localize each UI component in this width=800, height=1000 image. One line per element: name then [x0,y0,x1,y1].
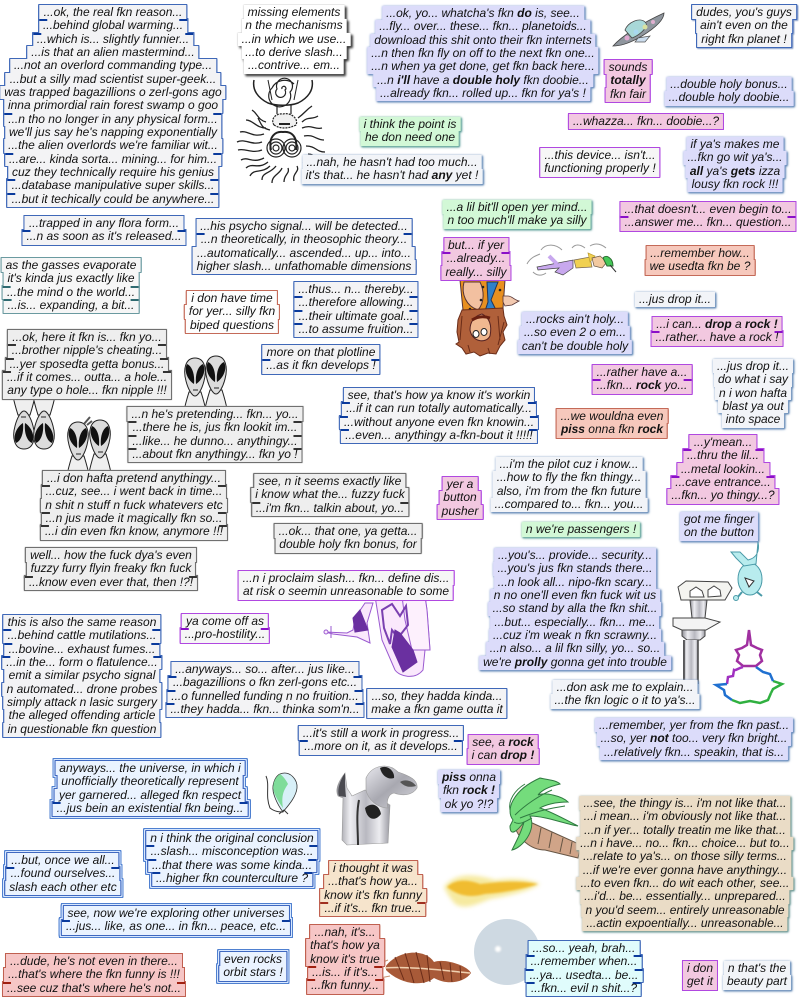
speech: whatcha's fkn do: ...fly... over... these... fkn... planetoids... [379,19,587,33]
speech: thus thereby: ...to assume fruition... [299,322,413,336]
speech: existential fkn being [53,761,247,816]
speech: cattle mutilations: ...behind cattle mutilations... [8,628,156,642]
speech: provide security: n no one'll even fkn fuck wit us [494,588,656,602]
icon: blue hanging creature [731,542,762,600]
speech: not like that: ...if we're ever gonna have anythingy... [583,863,787,877]
speech: found ourselves: ...but, once we all... [11,853,115,867]
speech: blast ya into space: do what i say [718,372,788,386]
speech: blast ya into space: blast ya out [722,399,784,413]
speech: cave entrance: ...thru the lil... [687,448,759,462]
speech: i thought it was: ...that's how ya... [328,874,418,888]
speech: dude he's not in there: ...that's where the fkn funny is !!! [8,967,180,981]
icon: fractal outline [716,630,782,703]
speech: provide security: ...so stand by alla the fkn shit... [493,601,657,615]
speech: found ourselves [5,853,121,895]
speech: dude he's not in there: ...see cuz that's where he's not... [7,981,181,995]
speech: drop a rock [650,316,784,347]
speech: fkn evil n shit: ...fkn... evil n shit...? [531,981,637,995]
speech: found ourselves: slash each other etc [9,880,117,894]
speech: blast ya into space: n i won hafta [719,386,787,400]
speech: sounds totally fkn fair: totally [610,73,646,87]
speech: cave entrance: ...y'mean... [694,435,752,449]
speech: make a fkn game: ...so, they hadda kinda... [372,689,502,703]
speech: existential fkn being: unofficially theoretically represent [61,774,239,788]
speech: know it's true [306,925,384,994]
speech: thus thereby: ...thus... n... thereby... [298,282,414,296]
speech: whatcha's fkn do: ...n then fkn fly on off to the next fkn one... [371,46,595,60]
speech: whazza doobie: ...whazza... fkn... doobie...? [573,114,719,128]
icon: palm tree [510,778,581,858]
speech: flora form: ...trapped in any flora form... [29,216,179,230]
speech: psycho signal: higher slash... unfathomable dimensions [197,259,411,273]
icon: alien second standing [203,356,229,430]
speech: he's pretending: ...n he's pretending... fkn... yo... [131,407,299,421]
speech: blast ya into space [712,358,796,431]
speech: yer from the past: ...relatively fkn... speakin, that is... [604,745,784,759]
icon: flying pilot [527,244,616,275]
speech: bagazillions funding: ...anyways... so... after... jus like... [175,662,355,676]
speech: double holy bonus for: double holy fkn bonus, for [279,537,417,551]
speech: bagazillions funding: ...they hadda... fkn... thinka som'n... [170,702,360,716]
speech: finger on button: on the button [684,525,754,539]
speech: original conclusion: n i think the original conclusion [150,831,314,845]
speech: provide security: ...you's... provide... security... [498,548,652,562]
icon: crystal sphere [474,919,540,985]
speech: sounds totally fkn fair [604,59,653,103]
speech: rather have a rock [592,364,693,395]
speech: not like that: ...to even fkn... do wit each other, see... [581,876,789,890]
speech: provide security: ...you's jus fkn stands there... [497,561,653,575]
speech: device not functioning: functioning properly ! [544,161,656,175]
speech: cattle mutilations: the alleged offending article [9,708,155,722]
speech: exactly like i know: i know what the... fuzzy fuck [255,487,405,501]
speech: know it's true: ...nah, it's... [315,925,375,939]
speech: he's pretending: ...about fkn anythingy... fkn yo ! [132,447,298,461]
speech: a rock i can drop: see, a rock [472,735,534,749]
speech: button pusher: yer a [447,477,473,491]
speech: piss onna fkn rock ok yo: fkn rock ! [443,783,495,797]
speech: bagazillions funding: ...o funnelled funding n no fruition... [171,689,359,703]
speech: global warming reason: ...but it techically could be anywhere... [12,192,214,206]
speech: more on plotline: more on that plotline [267,345,375,359]
speech: whatcha's fkn do: ...ok, yo... whatcha's fkn do is, see... [386,6,580,20]
speech: brother nipple: ...brother nipple's cheating... [12,343,162,357]
speech: button pusher [436,476,484,520]
speech: more on plotline: ...as it fkn develops ! [266,358,376,372]
speech: how ya know it's workin: ...without anyone even fkn knowin... [344,415,534,429]
icon: feather [378,952,471,983]
speech: provide security [478,546,674,673]
speech: doesn't begin to answer: ...that doesn't... even begin to... [624,202,792,216]
speech: make a fkn game: make a fkn game outta it [371,702,503,716]
speech: a lil bit: ...a lil bit'll open yer mind... [446,200,588,214]
speech: bagazillions funding: ...bagazillions o fkn zerl-gons etc... [173,675,357,689]
speech: global warming reason: ...are... kinda sorta... mining... for him... [9,152,217,166]
speech: i proclaim: ...n i proclaim slash... fkn... define dis... [243,571,449,585]
speech: not like that: n you'd seem... entirely unreasonable [585,903,785,917]
speech: pro-hostility: ya come off as [186,614,264,628]
speech: piss onna rock: ...we wouldna even [561,409,663,423]
speech: brother nipple: ...yer sposedta getta bonus... [10,357,164,371]
speech: don ask me to explain: ...don ask me to explain... [557,680,693,694]
speech: he don need one [358,116,464,149]
speech: pilot from future: ...how to fly the fkn thingy... [497,470,641,484]
icon: flying saucer [613,13,664,46]
speech: but if yer already silly: but... if yer [448,238,504,252]
speech: cave entrance: ...fkn... yo thingy...? [671,488,775,502]
speech: how ya know it's workin [338,387,539,444]
speech: psycho signal [192,218,417,275]
speech: global warming reason: ...but a silly mad scientist super-geek... [10,72,216,86]
speech: fuzzy furry flyin: ...know even ever that, then !?! [29,575,193,589]
speech: but if yer already silly [440,237,512,281]
speech: brother nipple: ...if it comes... outta... a hole... [7,370,167,384]
speech: the beauty part: n that's the [728,961,786,975]
speech: exploring other universes: ...jus... like, as one... in fkn... peace, etc... [66,919,286,933]
speech: fuzzy furry flyin: fuzzy furry flyin freaky fkn fuck [31,561,191,575]
speech: not like that: ...i mean... i'm obviously not like that... [584,809,786,823]
speech: even rocks orbit stars [219,952,287,981]
speech: doesn't begin to answer: ...answer me... fkn... question... [625,215,791,229]
speech: a lil bit [441,198,594,232]
speech: existential fkn being: yer garnered... alleged fkn respect [59,788,241,802]
speech: cave entrance: ...metal lookin... [681,462,765,476]
speech: i thought it was: know it's fkn funny [324,888,422,902]
speech: not like that: ...actin expoentially... unreasonable... [586,916,784,930]
speech: not like that: ...i'd... be... essentially... unprepared... [584,889,786,903]
speech: dudes wrong planet: right fkn planet ! [701,32,787,46]
speech: psycho signal: ...n theoretically, in theosophic theory... [201,232,407,246]
speech: global warming reason: ...not an overlord commanding type... [14,58,212,72]
speech: biped questions [184,290,280,334]
speech: pro-hostility [181,614,269,643]
speech: i don get it [683,961,717,990]
speech: but if yer already silly: really... silly [445,265,507,279]
speech: original conclusion: ...that there was some kinda... [152,858,312,872]
speech: psycho signal: ...his psycho signal... will be detected... [200,219,408,233]
speech: went back in time: ...i don hafta pretend anythingy... [47,471,221,485]
speech: make a fkn game [367,689,507,718]
speech: global warming reason: ...is that an alien mastermind... [31,45,195,59]
speech: the beauty part [723,961,791,990]
speech: double holy bonus for [273,522,424,554]
speech: whatcha's fkn do: ...n i'll have a double holy fkn doobie... [377,73,589,87]
speech: provide security: ...cuz i'm weak n fkn scrawny... [493,628,657,642]
speech: rocks ain't holy: can't be double holy [522,339,628,353]
speech: a rock i can drop: i can drop ! [472,748,534,762]
speech: remember how: we usedta fkn be ? [650,259,750,273]
speech: i proclaim: at risk o seemin unreasonable to some [243,584,449,598]
speech: global warming reason: ...database manipulative super skills... [12,178,214,192]
speech: biped questions: for yer... silly fkn [189,304,275,318]
speech: rocks ain't holy: ...rocks ain't holy... [526,312,624,326]
speech: psycho signal: ...automatically... ascended... up... into... [197,246,411,260]
speech: thus thereby: ...therefore allowing... [299,295,413,309]
speech: hasn't had any: it's that... he hasn't had any yet ! [306,168,478,182]
speech: rather have a rock: ...fkn... rock yo... [597,378,687,392]
speech: work in progress: ...more on it, as it develops... [304,739,458,753]
speech: double holy bonus: ...double holy bonus... [670,77,788,91]
speech: dudes wrong planet: ain't even on the [700,18,788,32]
speech: original conclusion: ...slash... misconception was... [151,844,313,858]
speech: rather have a rock: ...rather have a... [597,365,687,379]
speech: i don get it: i don [687,961,713,975]
speech: thus thereby: ...their ultimate goal... [299,309,413,323]
speech: he don need one: he don need one [365,130,455,144]
speech: cave entrance: ...cave entrance... [675,475,771,489]
speech: went back in time: ...n jus made it magically fkn so... [46,511,222,525]
speech: pilot from future: ...i'm the pilot cuz i know... [499,457,639,471]
speech: finger on button: got me finger [684,512,754,526]
speech: button pusher: pusher [442,504,478,518]
speech: exactly like i know [250,472,410,518]
speech: gasses evaporate [0,257,142,314]
speech: not like that: ...n if yer... totally treatin me like that... [584,823,786,837]
icon: stone hammer tower [673,581,732,684]
speech: double holy bonus: ...double holy doobie... [669,90,789,104]
speech: dudes wrong planet: dudes, you's guys [696,5,792,19]
icon: upside-down caveman [456,280,519,356]
speech: gasses evaporate: it's kinda jus exactly like [7,271,135,285]
speech: work in progress: ...it's still a work in progress... [303,726,459,740]
speech: drop a rock: ...i can... drop a rock ! [656,317,778,331]
speech: dude he's not in there: ...dude, he's not even in there... [10,954,178,968]
speech: more on plotline [261,344,380,375]
speech: n we're passengers: n we're passengers ! [526,522,636,536]
speech: the beauty part: beauty part [727,974,787,988]
speech: existential fkn being: anyways... the universe, in which i [59,761,241,775]
speech: how ya know it's workin: ...even... anythingy a-fkn-bout it !!!!! [345,428,533,442]
icon: balloon [266,773,297,814]
icon: chrome dog [337,766,417,845]
speech: lousy fkn rock [682,136,790,195]
speech: dudes wrong planet [691,4,799,50]
speech: lousy fkn rock: if ya's makes me [690,137,779,151]
speech: whatcha's fkn do [366,4,602,104]
speech: double holy bonus for: ...ok... that one, ya getta... [279,524,417,538]
speech: not like that: ...relate to ya's... on those silly terms... [583,849,787,863]
speech: global warming reason: cuz they technically require his genius [12,165,214,179]
speech: provide security: ...but... especially... fkn... me... [494,615,656,629]
speech: flora form: ...n as soon as it's released... [26,229,182,243]
speech: lousy fkn rock: lousy fkn rock !!! [692,177,778,191]
speech: global warming reason: ...ok, the real fkn reason... [44,5,182,19]
speech: missing elements: missing elements [248,5,340,19]
icon: aliens standing top [182,358,208,432]
speech: know it's true: that's how ya [310,938,380,952]
speech: gasses evaporate: as the gasses evaporate [6,258,136,272]
speech: he's pretending: ...like... he dunno... anythingy... [132,434,298,448]
speech: global warming reason: ...the alien overlords we're familiar wit... [8,138,218,152]
speech: even rocks orbit stars: orbit stars ! [223,965,283,979]
speech: how ya know it's workin: see, that's how ya know it's workin [348,388,530,402]
speech: biped questions: i don have time [191,291,273,305]
speech: he's pretending: ...there he is, jus fkn lookit im... [133,420,297,434]
speech: cattle mutilations: this is also the same reason [8,615,156,629]
speech: but if yer already silly: ...already... [447,251,505,265]
speech: device not functioning: ...this device... isn't... [544,148,656,162]
speech: blast ya into space: ...jus drop it... [717,359,789,373]
speech: jus drop it: ...jus drop it... [639,292,711,306]
speech: existential fkn being: ...jus bein an existential fkn being... [57,801,243,815]
speech: dude he's not in there [3,954,185,996]
speech: pilot from future: ...compared to... fkn... you... [495,497,643,511]
speech: missing elements: ...contrive... em... [248,58,340,72]
speech: remember how [644,245,756,276]
speech: not like that [576,796,794,931]
speech: know it's true: ...is... if it's... [312,965,378,979]
speech: rocks ain't holy [516,310,635,357]
speech: fkn evil n shit: ...remember when... [531,954,637,968]
speech: missing elements: ...to derive slash... [245,45,343,59]
icon: yellow flame [444,876,540,907]
speech: cattle mutilations: n automated... drone probes [7,682,157,696]
speech: original conclusion [146,831,318,886]
speech: i proclaim [239,571,453,600]
speech: i don get it: get it [687,974,713,988]
speech: even rocks orbit stars: even rocks [224,952,282,966]
speech: he don need one: i think the point is [364,117,456,131]
speech: global warming reason: we'll jus say he's napping exponentially [9,125,217,139]
speech: finger on button [678,510,761,544]
speech: global warming reason: ...n tho no longer in any physical form... [8,112,218,126]
speech: went back in time [39,469,228,542]
speech: went back in time: n shit n stuff n fuck whatevers etc [45,498,223,512]
speech: cattle mutilations: simply attack n lasic surgery [7,695,157,709]
speech: not like that: ...see, the thingy is... i'm not like that... [583,796,787,810]
speech: sounds totally fkn fair: fkn fair [610,87,646,101]
speech: whatcha's fkn do: ...n when ya get done, get fkn back here... [371,59,595,73]
speech: missing elements: ...in which we use... [242,32,346,46]
speech: how ya know it's workin: ...if it can run totally automatically... [346,401,532,415]
speech: don ask me to explain [550,680,700,709]
speech: went back in time: ...cuz, see... i went back in time... [46,484,222,498]
speech: don ask me to explain: ...the fkn logic o it to ya's... [554,693,696,707]
icon: upside-down aliens [11,375,57,449]
speech: a rock i can drop [468,735,538,764]
speech: yer from the past: ...so, yer not too... very fkn bright... [601,731,787,745]
speech: work in progress [299,726,463,755]
speech: pilot from future: also, i'm from the fkn future [497,484,641,498]
speech: hasn't had any [300,154,486,187]
speech: i thought it was: i thought it was [333,861,413,875]
speech: sounds totally fkn fair: sounds [609,60,647,74]
speech: i thought it was: ...if it's... fkn true... [325,901,421,915]
speech: provide security: ...n also... a lil fkn silly, yo... so... [490,641,660,655]
speech: lousy fkn rock: ...fkn go wit ya's... [688,150,782,164]
speech: global warming reason [0,4,226,208]
speech: brother nipple [1,328,172,401]
speech: cattle mutilations: in questionable fkn question [8,722,156,736]
speech: pilot from future [489,456,651,515]
speech: whatcha's fkn do: download this shit onto their fkn internets [374,33,592,47]
speech: original conclusion: ...higher fkn counterculture ? [156,871,308,885]
speech: whatcha's fkn do: ...already fkn... rolled up... fkn for ya's ! [380,86,586,100]
speech: brother nipple: any type o hole... fkn nipple !!! [7,383,167,397]
speech: missing elements: n the mechanisms [245,18,343,32]
speech: drop a rock: ...rather... have a rock ! [656,330,778,344]
speech: device not functioning [539,147,660,178]
speech: a lil bit: n too much'll make ya silly [447,213,586,227]
speech: not like that: ...n i have... no... fkn... choice... but to... [580,836,790,850]
icon: upside-down spiral figure [237,78,325,183]
speech: lousy fkn rock: all ya's gets izza [690,164,780,178]
speech: double holy bonus [663,76,797,109]
speech: piss onna fkn rock ok yo: ok yo ?!? [445,797,493,811]
speech: blast ya into space: into space [726,412,780,426]
speech: remember how: ...remember how... [650,246,750,260]
speech: button pusher: button [443,490,477,504]
speech: know it's true: ...fkn funny... [311,978,379,992]
speech: cave entrance [666,434,780,505]
speech: gasses evaporate: ...is... expanding, a bit... [8,298,134,312]
speech: doesn't begin to answer [619,201,796,232]
speech: global warming reason: ...which is... slightly funnier... [37,32,189,46]
speech: flora form [21,215,186,246]
speech: piss onna fkn rock ok yo [438,770,500,812]
speech: thus thereby [293,281,418,338]
speech: exactly like i know: see, n it seems exactly like [259,474,401,488]
speech: yer from the past [595,718,793,760]
speech: global warming reason: ...behind global warming... [43,18,183,32]
speech: know it's true: know it's true [310,952,380,966]
speech: rocks ain't holy: ...so even 2 o em... [524,325,626,339]
speech: fkn evil n shit: ...so... yeah, brah... [533,941,635,955]
speech: biped questions: biped questions [190,318,274,332]
speech: global warming reason: inna primordial rain forest swamp o goo [8,98,218,112]
speech: brother nipple: ...ok, here it fkn is... fkn yo... [12,330,162,344]
speech: piss onna rock [556,408,669,439]
speech: piss onna fkn rock ok yo: piss onna [442,770,496,784]
speech: provide security: ...n look all... nipo-fkn scary... [498,575,652,589]
speech: fkn evil n shit: ...ya... usedta... be... [530,968,638,982]
speech: fkn evil n shit [526,941,642,996]
icon: high-fiving aliens [65,417,113,496]
speech: cattle mutilations [2,615,162,737]
speech: went back in time: ...i din even fkn know, anymore !!! [45,524,223,538]
speech: exploring other universes: see, now we're exploring other universes [67,906,285,920]
speech: cattle mutilations: ...bovine... exhaust fumes... [9,642,155,656]
speech: i thought it was [320,861,426,916]
speech: cattle mutilations: ...in the... form o flatulence... [6,655,158,669]
speech: found ourselves: ...found ourselves... [11,866,115,880]
speech: piss onna rock: piss onna fkn rock [561,422,663,436]
speech: pro-hostility: ...pro-hostility... [185,627,265,641]
speech: exploring other universes [62,906,290,935]
speech: bagazillions funding [166,662,364,717]
speech: he's pretending [126,405,304,464]
icon: purple robed figure [324,596,430,676]
speech: fuzzy furry flyin [23,546,198,592]
speech: gasses evaporate: ...the mind o the world... [7,285,135,299]
speech: missing elements [237,4,355,78]
speech: hasn't had any: ...nah, he hasn't had too much... [306,155,478,169]
speech: exactly like i know: ...i'm fkn... talkin about, yo... [256,501,404,515]
speech: fuzzy furry flyin: well... how the fuck dya's even [30,548,192,562]
speech: yer from the past: ...remember, yer from the fkn past... [599,718,789,732]
speech: cattle mutilations: emit a similar psycho signal [9,668,155,682]
speech: provide security: we're prolly gonna get into trouble [483,655,667,669]
speech: global warming reason: was trapped bagazillions o zerl-gons ago [4,85,222,99]
